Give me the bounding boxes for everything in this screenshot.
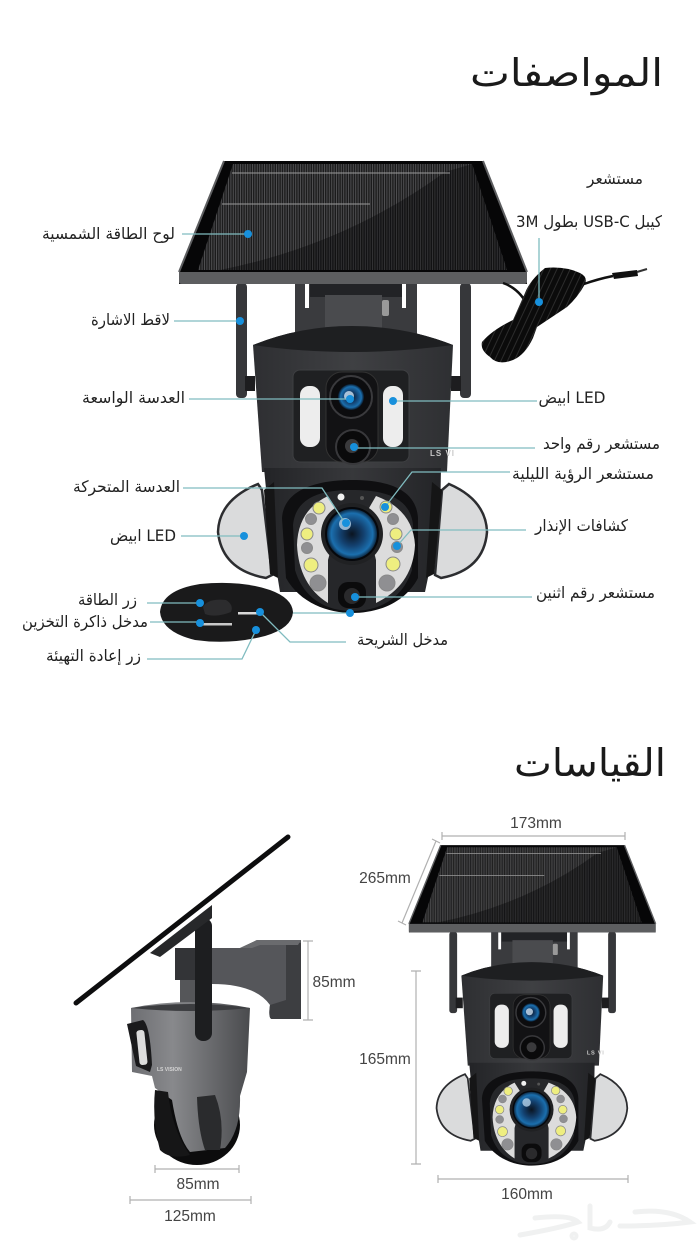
dimension: 265mm: 265mm (359, 870, 411, 887)
front view camera (409, 845, 656, 1166)
callout: reset button (46, 626, 260, 666)
dimension: 165mm (359, 971, 421, 1164)
callout: white LED upper (389, 388, 606, 408)
camera front view with callouts (179, 161, 527, 613)
callout: sensor one (350, 434, 660, 454)
callout: USB-C cable: كيبل USB-C بطول 3M (516, 212, 662, 232)
dimension: 265mm (359, 839, 440, 925)
icon: USB-C cable coil (482, 268, 647, 362)
callout: SIM slot: مدخل الشريحة (357, 630, 448, 650)
callout: moving lens (73, 477, 350, 527)
callout: alarm spotlights (393, 516, 628, 550)
dimension: 173mm: 173mm (510, 815, 562, 832)
callout: antenna: لاقط الاشارة (91, 310, 170, 330)
dimension: 125mm: 125mm (164, 1208, 216, 1225)
callout: night vision sensor (381, 464, 654, 511)
callout: sensor two: مستشعر رقم اثنين (536, 583, 655, 603)
dimension: 85mm bottom: 85mm (176, 1176, 220, 1193)
callout: wide lens (82, 388, 354, 408)
side view camera (76, 837, 301, 1165)
callout: white LED left (110, 526, 248, 546)
callout: power button: زر الطاقة (78, 590, 137, 610)
callout: white LED left: LED ابيض (110, 526, 176, 546)
callout: alarm spotlights: كشافات الإنذار (534, 516, 628, 536)
dimension: 160mm (438, 1175, 628, 1203)
dimension: 85mm depth: 85mm (312, 974, 356, 991)
callout: antenna (91, 310, 244, 330)
callout: white LED upper: LED ابيض (538, 388, 606, 408)
callout: memory card slot: مدخل ذاكرة التخزين (22, 612, 148, 632)
callout: solar panel: لوح الطاقة الشمسية (42, 224, 175, 244)
callout: moving lens: العدسة المتحركة (73, 477, 180, 497)
callout: sensor one: مستشعر رقم واحد (543, 434, 660, 454)
dimension: 85mm bottom (155, 1165, 239, 1193)
dimension: 165mm: 165mm (359, 1051, 411, 1068)
callout: reset button: زر إعادة التهيئة (46, 646, 141, 666)
callout: USB-C cable (516, 212, 662, 306)
callout: wide lens: العدسة الواسعة (82, 388, 185, 408)
title: specifications: المواصفات (470, 51, 663, 96)
dimension: 125mm (130, 1196, 251, 1225)
callout: SIM slot (256, 608, 448, 650)
ports module with button callouts (22, 583, 448, 666)
watermark (520, 1206, 690, 1238)
side view camera: LS VISION (157, 1067, 182, 1073)
title: dimensions: القياسات (514, 741, 666, 785)
label: sensor: مستشعر (586, 169, 643, 189)
dimension: 85mm depth (303, 941, 356, 1020)
callout: solar panel (42, 224, 252, 244)
callout: power button (78, 590, 204, 610)
dimension: 173mm (442, 815, 625, 840)
callout: night vision sensor: مستشعر الرؤية الليلية (512, 464, 654, 484)
callout: sensor two (351, 583, 655, 603)
dimension: 160mm: 160mm (501, 1186, 553, 1203)
